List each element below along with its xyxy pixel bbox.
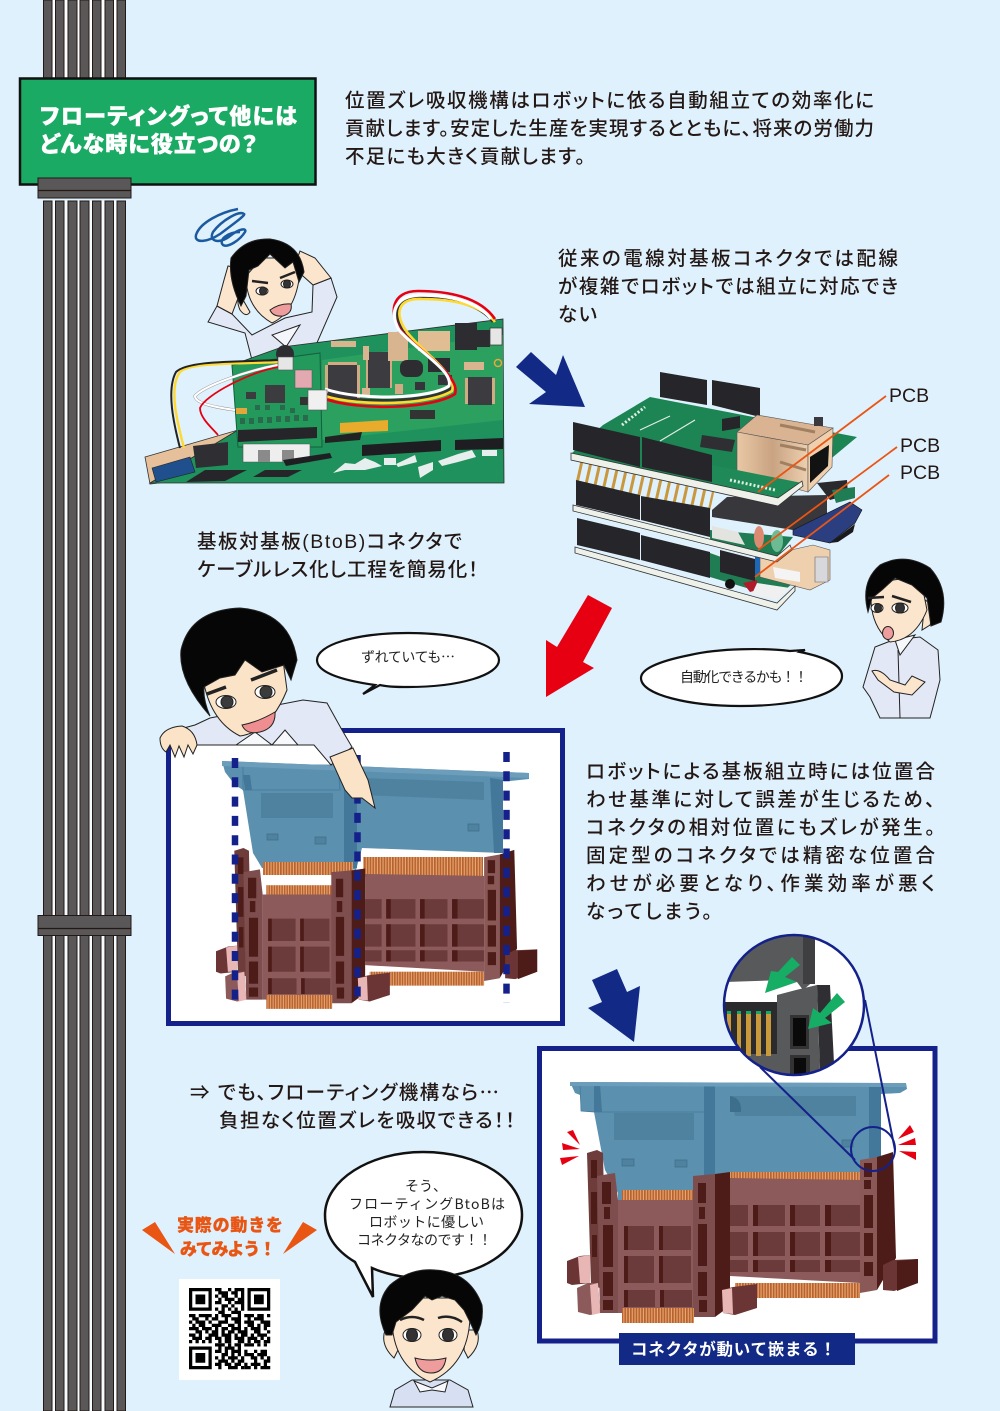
intro text: 貢献します。安定した生産を実現するとともに、将来の労働力 [345,118,874,140]
label: PCB third: PCB [900,462,940,484]
icon: dizzy squiggle [196,209,245,246]
stack: top board front strip [571,453,803,506]
connector: blue mating part (seated) [570,1082,907,1201]
stack: middle board [573,480,862,562]
stack: middle black headers and gold pins [576,472,712,537]
person: hair [181,608,297,716]
stack: front black headers [573,422,712,482]
panel: seated connector [540,1048,935,1341]
text: cable complexity: が複雑でロボットでは組立に対応でき [558,276,898,298]
connector: brown board connector (misaligned) [216,848,537,1009]
stack: top board [572,397,857,502]
wires: white red yellow black harness [171,291,495,448]
person: smiling man [380,1270,482,1407]
person: face [204,658,287,736]
text: BtoB connector [197,531,478,581]
board: white wire connectors [276,345,327,410]
speech bubble: automation [641,649,842,706]
text: problem explanation: わせが必要となり、作業効率が悪く [586,873,935,895]
stack: RJ45 jack [737,415,833,492]
speech bubble: robot friendly: フローティングBtoBは [349,1194,505,1214]
text: problem explanation: 固定型のコネクタでは精密な位置合 [586,845,935,867]
text: floating benefit: 負担なく位置ズレを吸収できる！！ [219,1109,515,1132]
panel: misaligned connector [166,728,565,1026]
stack: rear headers [660,372,760,417]
text: problem explanation: ロボットによる基板組立時には位置合 [586,761,935,783]
arrow: red left-down [546,595,612,697]
speech bubble: offset: ずれていても… [361,647,455,667]
callout: magnified detail [724,935,864,1080]
callout: see it in action: 実際の動きを [177,1215,283,1235]
person: left hand [160,726,197,757]
connector: brown board connector (seated) [567,1150,918,1323]
text: BtoB connector: 基板対基板(BtoB)コネクタで [197,531,462,553]
text: BtoB connector: ケーブルレス化し工程を簡易化！ [197,558,478,581]
label: connector moves and seats [619,1333,855,1365]
stack: lower board [575,545,830,610]
speech bubble: robot friendly: コネクタなのです！！ [357,1230,492,1250]
title box: どんな時に役立つの？ [40,132,257,157]
cable bundle with clips [38,0,131,1411]
callout: magnifier leader lines and small circle [760,1000,895,1171]
arrow: navy right-down [516,352,585,407]
connector: blue mating part (misaligned) [222,761,529,877]
text: problem explanation: なってしまう。 [586,901,712,923]
callout: see it in action [142,1215,317,1259]
intro text [345,89,874,168]
text: problem explanation: コネクタの相対位置にもズレが発生。 [586,816,935,839]
person: worried man [208,239,337,360]
text: cable complexity [558,248,898,326]
icon: red motion bursts left [560,1130,580,1165]
speech bubble: automation: 自動化できるかも！！ [680,667,808,687]
QR code [179,1279,280,1380]
intro text: 位置ズレ吸収機構はロボットに依る自動組立ての効率化に [345,89,874,112]
text: problem explanation: わせ基準に対して誤差が生じるため、 [586,789,935,811]
dashed alignment lines [235,752,506,1008]
label: connector moves and seats: コネクタが動いて嵌まる！ [631,1339,836,1359]
main board with tangled wires [145,291,504,484]
text: problem explanation [586,761,935,923]
text: floating benefit [190,1076,515,1132]
title box: フローティングって他には [40,104,297,129]
arrow: navy down [588,969,640,1042]
text: floating benefit: ⇒ でも、フローティング機構なら… [190,1076,499,1105]
title box [20,78,316,184]
speech bubble: offset [317,633,499,694]
icon: red motion bursts right [898,1125,916,1160]
intro text: 不足にも大きく貢献します。 [345,146,585,168]
clip: upper cable clip [38,178,131,198]
person: pointing arm [330,748,375,808]
stacked PCB illustration [571,372,940,610]
board: green PCB [150,319,504,483]
text: cable complexity: ない [558,304,597,326]
speech bubble: robot friendly [325,1152,522,1297]
label: PCB second: PCB [900,435,940,457]
person: shirt [165,700,352,765]
clip: lower cable clip [38,916,131,936]
person: man with crossed arms [863,559,944,718]
callout: see it in action: みてみよう！ [180,1240,276,1259]
board: beige connector base [145,430,260,484]
board: component layout [152,323,503,482]
text: cable complexity: 従来の電線対基板コネクタでは配線 [558,248,898,270]
person: man pointing at the connector [160,608,375,808]
speech bubble: robot friendly: ロボットに優しい [369,1212,484,1232]
stack: PCB leader lines [755,396,897,577]
label: PCB: PCB [889,385,929,407]
speech bubble: robot friendly: そう、 [405,1176,447,1196]
stack: lower black headers [577,518,710,578]
